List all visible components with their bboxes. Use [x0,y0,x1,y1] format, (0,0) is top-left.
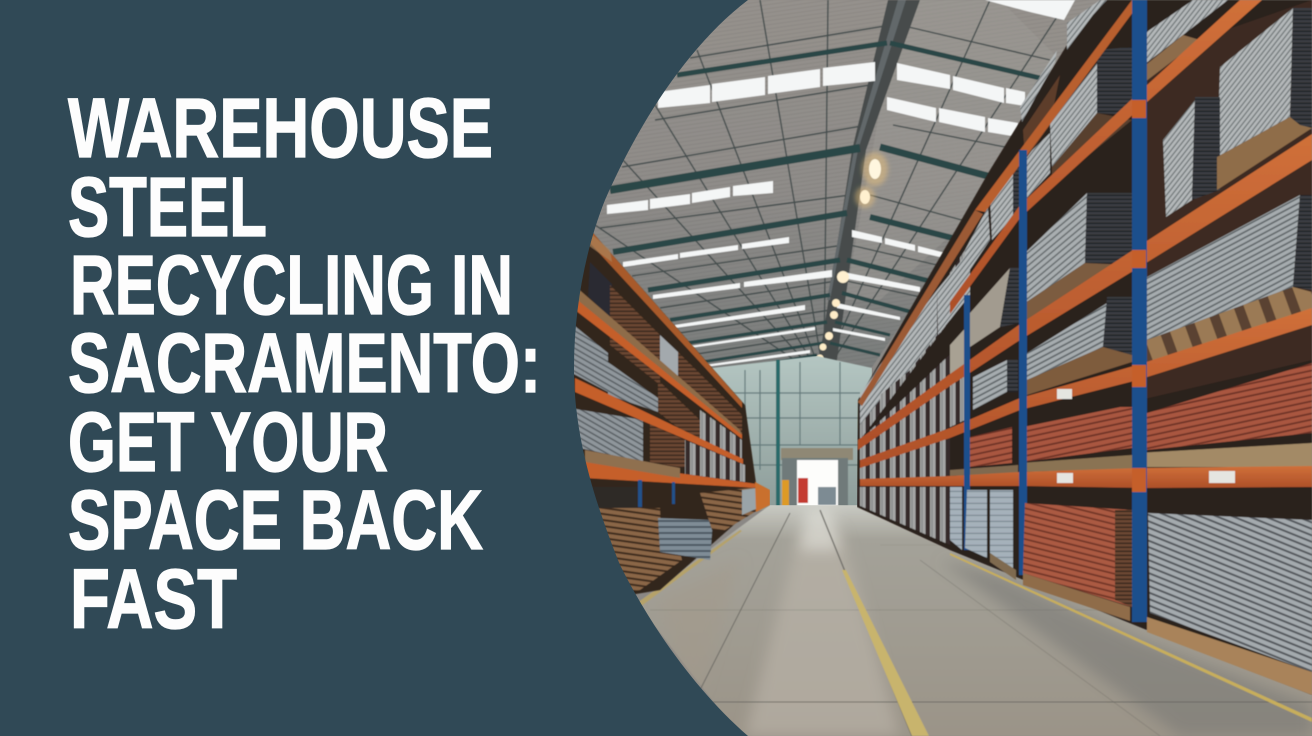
trusses [610,43,1040,373]
third row sheets [1027,303,1107,380]
top row sheets [1217,8,1293,157]
upper left stacks [588,262,612,320]
truck outside [818,487,836,505]
left beams [590,233,742,408]
lower panels [950,487,962,550]
title: STEEL [68,160,267,254]
hanging lights [816,152,888,372]
title: GET YOUR [68,395,388,489]
lower grey sheets [1148,513,1312,672]
red stacks [1147,363,1312,450]
title: FAST [70,552,237,646]
title [68,81,541,646]
red stack outside [798,478,808,503]
timber pallets [597,508,682,592]
left skylights [607,62,875,367]
floor pallets [1147,617,1312,695]
right skylights [833,0,1075,341]
center yellow line [842,570,929,736]
uprights [1132,0,1147,622]
lower red stack [1023,503,1132,607]
bright loading door [797,460,838,507]
title: WAREHOUSE [68,81,493,175]
roof ridge [818,0,920,367]
title: SPACE BACK [68,473,483,567]
far rack mini-stacks [860,250,965,440]
lower left stacks [570,408,643,462]
distant stacks [700,487,760,530]
under-beam racks [590,487,637,509]
floor [637,505,1312,736]
left racking [570,225,770,600]
rack labels [1057,389,1235,483]
middle left stacks [570,322,608,392]
purlins [595,0,1068,365]
second row sheets [1147,195,1300,340]
left panel with curved edge [0,0,748,736]
right yellow line [950,553,1312,722]
title: SACRAMENTO: [68,316,541,410]
pallets on beam D [1137,443,1312,467]
end wall with door [712,356,872,510]
far rack top stacks [937,250,970,335]
floor joints [650,510,1312,736]
grey stack on floor [658,518,713,560]
title: RECYCLING IN [70,238,513,332]
ceiling [570,0,1130,373]
shelf pallets [588,233,612,262]
right racking [857,0,1312,695]
pallets on beams [1147,287,1312,362]
left yellow line [637,530,742,607]
beams [975,0,1142,212]
yellow posts [782,480,789,507]
